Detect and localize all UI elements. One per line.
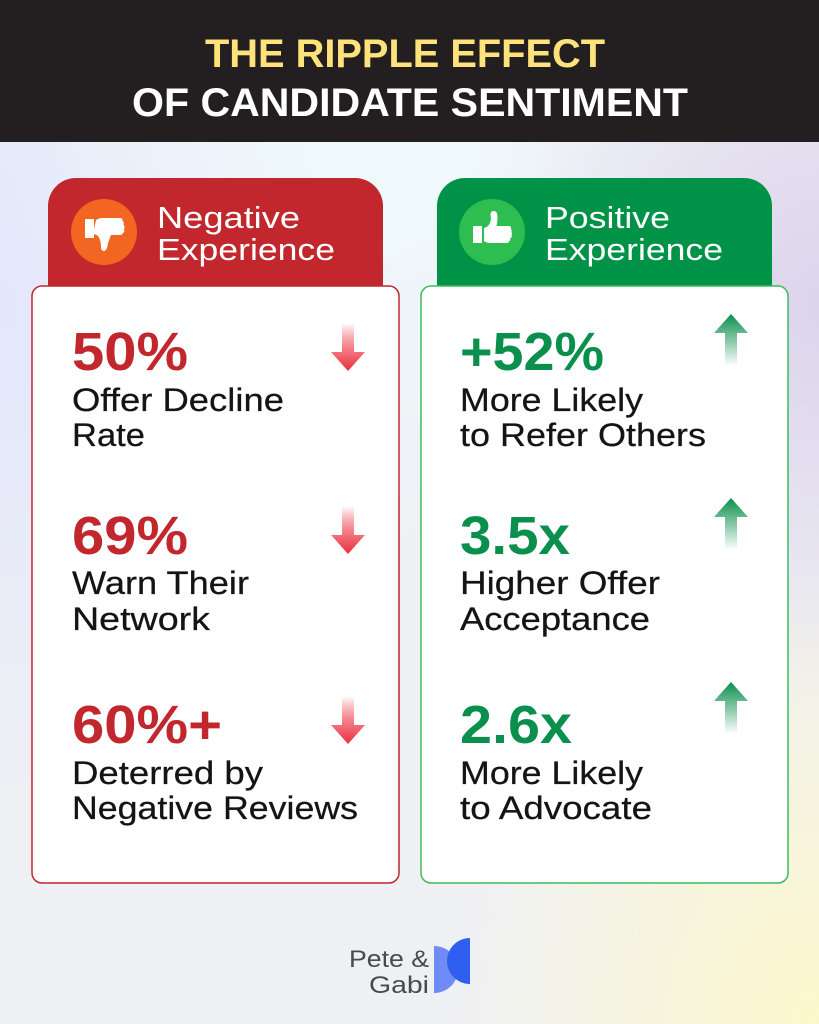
- stat: 2.6x: More Likely: [460, 755, 643, 791]
- panel: positive experience: [421, 178, 788, 883]
- stat: +52%: More Likely: [460, 382, 643, 418]
- negative header tab: [48, 178, 383, 290]
- stat: 3.5x: Acceptance: [460, 601, 650, 637]
- title line 2: OF CANDIDATE SENTIMENT: [132, 81, 688, 125]
- icon: up arrow 3: [714, 682, 748, 734]
- icon: up arrow 2: [714, 498, 748, 550]
- stat: 69%: Warn Their: [72, 565, 249, 601]
- stat: 69%: Network: [72, 601, 211, 637]
- positive card: [421, 286, 788, 883]
- negative header text: Negative: [157, 200, 300, 235]
- logo text: Gabi: [369, 972, 429, 999]
- stat: 60%+: 60%+: [72, 695, 222, 755]
- logo text: Pete &: [349, 946, 429, 973]
- icon: thumbs up: [459, 199, 525, 265]
- stat: 50%: [72, 322, 284, 453]
- icon: up arrow 1: [714, 314, 748, 366]
- stat: 50%: Rate: [72, 417, 145, 453]
- icon: thumbs down: [71, 199, 137, 265]
- positive header text: Positive: [545, 200, 670, 235]
- stat: 3.5x: Higher Offer: [460, 565, 660, 601]
- stat: 60%+: [72, 695, 358, 826]
- negative header text: Experience: [157, 232, 335, 267]
- stat: +52%: [460, 322, 706, 453]
- stat: 69%: 69%: [72, 506, 188, 566]
- stat: 50%: 50%: [72, 322, 188, 382]
- panel: negative experience: [32, 178, 399, 883]
- stat: 3.5x: 3.5x: [460, 506, 570, 566]
- logo mark: [434, 938, 470, 993]
- stat: 2.6x: [460, 695, 652, 826]
- stat: 60%+: Negative Reviews: [72, 790, 358, 826]
- positive header text: Experience: [545, 232, 723, 267]
- icon: down arrow 3: [331, 696, 365, 744]
- stat: +52%: +52%: [460, 322, 604, 382]
- stat: 2.6x: to Advocate: [460, 790, 652, 826]
- title line 1: THE RIPPLE EFFECT: [205, 32, 605, 76]
- title banner: [0, 0, 819, 142]
- icon: down arrow 1: [331, 323, 365, 371]
- stat: 69%: [72, 506, 249, 637]
- logo: Pete & Gabi: [349, 938, 470, 999]
- stat: 50%: Offer Decline: [72, 382, 284, 418]
- positive header tab: [437, 178, 772, 290]
- stat: 2.6x: 2.6x: [460, 695, 572, 755]
- stat: 60%+: Deterred by: [72, 755, 263, 791]
- stat: 3.5x: [460, 506, 660, 637]
- icon: down arrow 2: [331, 506, 365, 554]
- stat: +52%: to Refer Others: [460, 417, 706, 453]
- negative card: [32, 286, 399, 883]
